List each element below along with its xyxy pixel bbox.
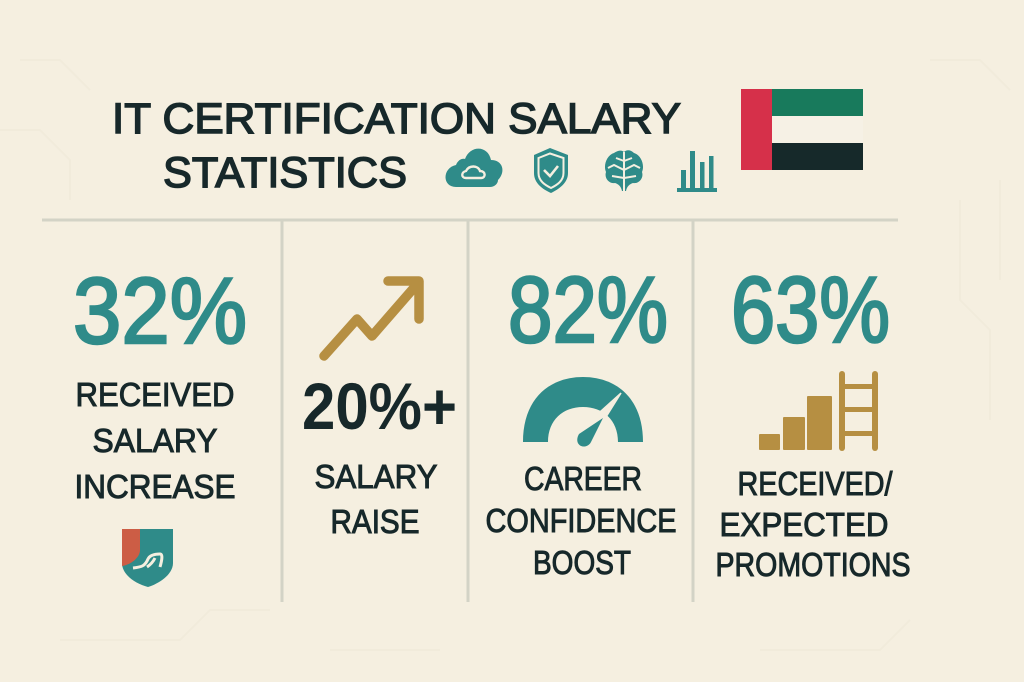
panel: received or expected promotions xyxy=(716,257,910,583)
title: IT CERTIFICATION SALARY xyxy=(112,95,681,143)
icon: shield xyxy=(534,148,568,193)
icon: UAE flag xyxy=(741,89,863,170)
icon: rising arrow xyxy=(324,281,419,356)
panel: salary raise xyxy=(302,281,457,540)
label: received salary increase: RECEIVED xyxy=(76,376,234,413)
title: STATISTICS xyxy=(163,149,407,197)
icon: gauge xyxy=(523,377,643,447)
label: received expected promotions xyxy=(716,465,910,583)
label: career confidence boost xyxy=(486,460,676,581)
icon: brain xyxy=(605,150,643,191)
icon: cloud xyxy=(446,149,502,187)
label: salary raise: SALARY xyxy=(314,458,438,495)
stat: 32%: 32% xyxy=(73,258,247,363)
label: salary raise: RAISE xyxy=(330,503,420,540)
stat: 82%: 82% xyxy=(508,257,668,362)
icon: bars and ladder xyxy=(759,371,878,451)
label: career confidence boost: CAREER xyxy=(524,460,642,497)
stat: 20%+: 20%+ xyxy=(302,369,457,443)
label: received salary increase: SALARY xyxy=(92,422,218,459)
icon: badge shield xyxy=(122,529,173,587)
label: career confidence boost: CONFIDENCE xyxy=(486,502,676,539)
label: received expected promotions: PROMOTIONS xyxy=(716,546,910,583)
title xyxy=(112,95,681,197)
label: received expected promotions: EXPECTED xyxy=(720,506,888,543)
stat: 63%: 63% xyxy=(731,257,890,362)
panel: career confidence boost xyxy=(486,257,676,581)
label: received salary increase xyxy=(74,376,236,505)
label: career confidence boost: BOOST xyxy=(533,544,631,581)
label: received salary increase: INCREASE xyxy=(74,468,236,505)
label: received expected promotions: RECEIVED/ xyxy=(738,465,893,502)
label: salary raise xyxy=(314,458,438,540)
icon: bar chart xyxy=(677,151,717,192)
panel: received salary increase xyxy=(73,258,247,587)
